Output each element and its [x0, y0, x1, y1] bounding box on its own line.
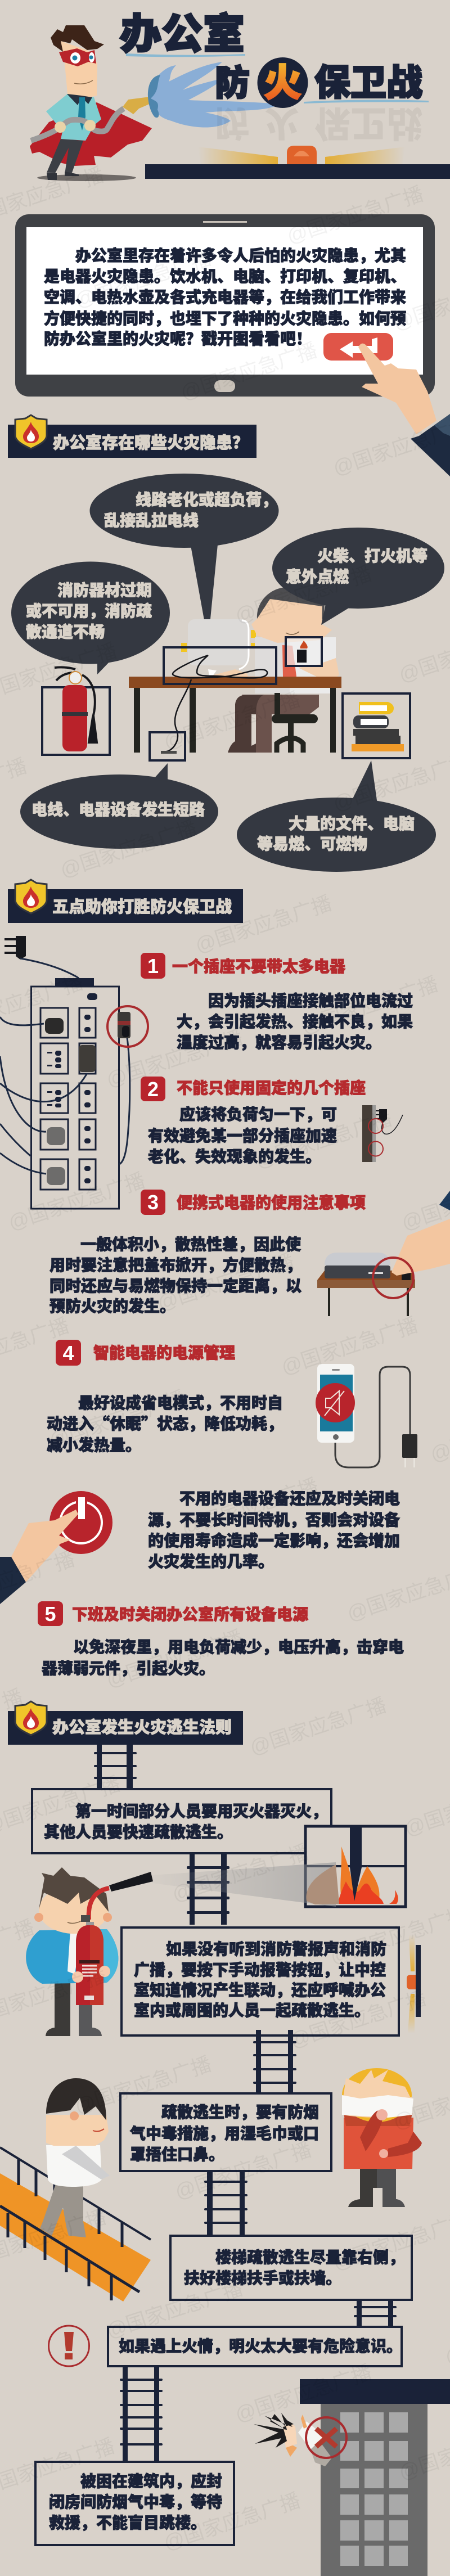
monitor	[181, 619, 256, 676]
highlight box: outlet	[150, 732, 185, 760]
text: @国家应急广播	[155, 1249, 297, 1315]
escape rule 3 box	[120, 2093, 331, 2171]
title: 办公室防火保卫战: 保卫战	[314, 62, 422, 103]
wall siren	[407, 1935, 421, 2033]
icon: exclamation	[48, 2326, 89, 2366]
badge 3: 3	[147, 1191, 159, 1214]
socket holes	[47, 1015, 91, 1183]
overloaded plug with red circle	[107, 1006, 148, 1047]
bubble: short circuit: 电线、电器设备发生短路	[32, 800, 205, 818]
plugs	[45, 1018, 96, 1185]
tip 4 second paragraph: 火灾发生的几率。	[148, 1552, 274, 1570]
text: @国家应急广播	[161, 2489, 303, 2555]
siren on dark bar	[145, 146, 450, 179]
office worker	[208, 587, 339, 753]
escape rule 1 box: 第一时间部分人员要用灭火器灭火，	[75, 1802, 327, 1820]
tablet intro panel	[15, 214, 435, 397]
badge 5: 5	[44, 1602, 56, 1625]
hand pressing button	[358, 344, 450, 476]
badge 2	[141, 1077, 165, 1101]
windows	[340, 2412, 408, 2566]
highlight box: lighter	[286, 637, 322, 666]
title: 办公室防火保卫战: 保卫战	[314, 103, 422, 143]
title: 办公室防火保卫战: 办公室	[120, 11, 245, 57]
tip 3: 用时要注意把盖布掀开，方便散热，	[50, 1256, 302, 1274]
left socket column	[40, 1008, 68, 1190]
tip 1: 大，会引起发热、接触不良，如果	[177, 1012, 413, 1030]
shield icon	[15, 880, 47, 913]
tip 4	[47, 1340, 283, 1454]
section header 2: 五点助你打胜防火保卫战	[52, 897, 232, 916]
ladder 4	[204, 2170, 248, 2235]
tip 2: 老化、失效现象的发生。	[148, 1147, 321, 1165]
text: @国家应急广播	[46, 1386, 188, 1452]
bubble: flammables: 等易燃、可燃物	[257, 835, 367, 853]
section header 2	[8, 880, 243, 923]
title: 办公室防火保卫战: 火	[264, 103, 299, 142]
desk	[129, 677, 341, 753]
tip 2: 应该将负荷匀一下，可	[179, 1105, 337, 1123]
badge 1: 1	[147, 954, 159, 978]
section header 1	[8, 415, 256, 458]
burning window	[305, 1826, 406, 1907]
bubble: wiring: 乱接乱拉电线	[104, 511, 199, 529]
stairs with railing	[0, 2147, 151, 2302]
tip 4: 智能电器的电源管理	[93, 1344, 235, 1362]
tip 4 second paragraph: 不用的电器设备还应及时关闭电	[179, 1489, 400, 1507]
tip 3: 同时还应与易燃物保持一定距离，以	[50, 1277, 302, 1295]
text: @国家应急广播	[299, 972, 441, 1038]
tip 4 second paragraph: 源，不要长时间待机，否则会对设备	[148, 1511, 400, 1529]
ladder 6	[120, 2367, 163, 2461]
text: @国家应急广播	[178, 339, 320, 404]
title: 办公室防火保卫战	[120, 11, 429, 143]
intro text: 办公室里存在着许多令人后怕的火灾隐患，尤其	[75, 246, 406, 264]
tip 2: 有效避免某一部分插座加速	[148, 1127, 337, 1145]
badge 3	[141, 1190, 165, 1215]
tip 3: 预防火灾的发生。	[50, 1297, 176, 1315]
desk scene	[129, 587, 341, 760]
escape rule 5 box: 如果遇上火情，明火太大要有危险意识。	[119, 2337, 402, 2355]
highlight box: wires	[164, 647, 276, 751]
text: @国家应急广播	[6, 1169, 148, 1235]
text: @国家应急广播	[104, 2277, 246, 2343]
ladder 3	[253, 2030, 296, 2093]
badge 4: 4	[62, 1341, 74, 1364]
tip 1: 因为插头插座接触部位电流过	[208, 992, 413, 1010]
tip 1: 温度过高，就容易引起火灾。	[177, 1033, 381, 1051]
portable device on table with hand	[317, 1191, 450, 1316]
phone with charger	[316, 1364, 417, 1467]
tip 3: 一般体积小，散热性差，因此使	[80, 1236, 301, 1253]
tip 1: 一个插座不要带太多电器	[172, 957, 345, 975]
escape rule 4 box: 扶好楼梯扶手或扶墙。	[184, 2269, 341, 2287]
extinguisher spray beam	[152, 1862, 339, 1907]
badge 4	[56, 1340, 81, 1366]
tip 4: 最好设成省电模式，不用时自	[78, 1394, 283, 1412]
escape rule 3 box: 疏散逃生时，要有防烟	[161, 2103, 319, 2121]
escape rule 2 box: 室知道情况产生联动，还应呼喊办公	[134, 1981, 386, 1999]
hero illustration: superhero with hose	[30, 25, 152, 181]
title: 办公室防火保卫战: 火	[263, 62, 302, 105]
bubble: ignition: 火柴、打火机等	[317, 547, 428, 565]
tip 4 second paragraph	[148, 1489, 400, 1570]
badge 1	[141, 953, 165, 979]
section header 3	[8, 1701, 243, 1745]
escape rule 2 box	[122, 1928, 399, 2035]
text: @国家应急广播	[179, 1474, 321, 1540]
escape rule 3 box: 罩捂住口鼻。	[130, 2145, 224, 2163]
text: @国家应急广播	[284, 182, 426, 248]
tip 4: 动进入“休眠”状态，降低功耗，	[47, 1412, 283, 1434]
section header 3: 办公室发生火灾逃生法则	[52, 1718, 232, 1737]
title: 办公室防火保卫战: 防	[215, 103, 250, 142]
tip 3	[50, 1190, 366, 1315]
bubble: extinguishers: 消防器材过期	[57, 581, 152, 599]
escape rule 6 box	[35, 2462, 234, 2545]
bubble: extinguishers	[11, 561, 170, 674]
text: @国家应急广播	[161, 688, 303, 754]
tip 2	[141, 1077, 366, 1165]
ladder 5	[354, 2300, 397, 2326]
bubble: ignition	[272, 528, 444, 625]
mini power strip icon	[362, 1105, 403, 1162]
fire extinguisher in box	[42, 667, 110, 755]
intro text	[44, 246, 406, 348]
return key button	[323, 333, 393, 361]
power strip illustration	[0, 936, 148, 1209]
badge 2: 2	[147, 1078, 159, 1101]
tip 3: 便携式电器的使用注意事项	[177, 1194, 366, 1212]
escape rule 4 box: 楼梯疏散逃生尽量靠右侧，	[215, 2248, 404, 2266]
text: @国家应急广播	[278, 1313, 421, 1379]
intro text: 防办公室里的火灾呢？戳开图看看吧！	[44, 330, 312, 348]
chair	[272, 693, 318, 753]
text: @国家应急广播	[232, 2361, 375, 2426]
bubble: ignition: 意外点燃	[286, 568, 349, 586]
bubble: flammables	[237, 760, 436, 872]
shield icon	[15, 1701, 47, 1735]
title: 办公室防火保卫战: 防	[215, 64, 250, 103]
badge 5	[38, 1601, 63, 1626]
shield icon	[15, 415, 47, 449]
intro text: 方便快捷的同时，也埋下了种种的火灾隐患。如何预	[44, 309, 406, 327]
tip 5: 下班及时关闭办公室所有设备电源	[72, 1605, 308, 1623]
man on stairs with towel	[40, 2078, 110, 2237]
text: @国家应急广播	[192, 891, 335, 957]
building	[300, 2379, 450, 2576]
escape rule 3 box: 气中毒措施，用湿毛巾或口	[130, 2125, 319, 2142]
tip 1	[141, 953, 413, 1051]
text: @国家应急广播	[287, 1987, 429, 2052]
plug and cable	[4, 936, 94, 987]
escape rule 2 box: 如果没有听到消防警报声和消防	[166, 1940, 386, 1958]
intro text: 是电器火灾隐患。饮水机、电脑、打印机、复印机、	[44, 267, 406, 285]
escape rule 1 box	[32, 1789, 331, 1853]
text: @国家应急广播	[232, 562, 375, 628]
falling person with red cross	[254, 2413, 346, 2466]
text: @国家应急广播	[253, 1107, 395, 1173]
man with extinguisher	[26, 1867, 153, 2036]
bubble: short circuit	[20, 763, 218, 849]
books in box	[343, 693, 410, 758]
bubble: wiring: 线路老化或超负荷，	[136, 491, 277, 508]
text: @国家应急广播	[169, 1840, 312, 1906]
bubble: wiring	[90, 474, 279, 642]
text: @国家应急广播	[104, 1626, 246, 1692]
escape rule 6 box: 被困在建筑内，应封	[80, 2472, 222, 2490]
escape rule 1 box: 其他人员要快速疏散逃生。	[44, 1823, 233, 1841]
tip 5: 器薄弱元件，引起火灾。	[42, 1659, 215, 1677]
text: @国家应急广播	[247, 1694, 389, 1759]
bubble: extinguishers: 散通道不畅	[26, 623, 105, 641]
tip 5	[38, 1601, 404, 1677]
text: @国家应急广播	[104, 1026, 246, 1092]
text: @国家应急广播	[172, 2138, 314, 2204]
text: @国家应急广播	[72, 2052, 214, 2118]
escape rule 6 box: 闭房间防烟气中毒，等待	[49, 2493, 222, 2511]
escape rule 2 box: 广播，要按下手动报警按钮，让中控	[134, 1961, 386, 1979]
text: @国家应急广播	[72, 246, 214, 312]
escape rule 6 box: 救援，不能盲目跳楼。	[49, 2514, 206, 2532]
escape rule 5 box	[108, 2327, 402, 2366]
cables	[0, 1017, 130, 1174]
intro text: 空调、电热水壶及各式充电器等，在给我们工作带来	[44, 288, 406, 306]
bubble: extinguishers: 或不可用，消防疏	[26, 602, 152, 620]
section header 1: 办公室存在哪些火灾隐患？	[53, 433, 249, 452]
man with mask	[342, 2068, 422, 2207]
tip 4: 减小发热量。	[47, 1436, 141, 1454]
text: @国家应急广播	[57, 816, 200, 882]
tip 2: 不能只使用固定的几个插座	[177, 1079, 366, 1097]
escape rule 2 box: 室内或周围的人员一起疏散逃生。	[134, 2001, 370, 2019]
escape rule 4 box	[170, 2236, 412, 2300]
water spray	[148, 62, 280, 128]
power button with hand	[0, 1491, 112, 1604]
ladder 1	[94, 1745, 137, 1789]
tip 5: 以免深夜里，用电负荷减少，电压升高，击穿电	[73, 1638, 404, 1656]
right socket column	[79, 1008, 96, 1190]
ladder 2	[187, 1853, 230, 1925]
tip 4 second paragraph: 的使用寿命造成一定影响，还会增加	[148, 1532, 400, 1550]
bubble: flammables: 大量的文件、电脑	[289, 814, 415, 832]
